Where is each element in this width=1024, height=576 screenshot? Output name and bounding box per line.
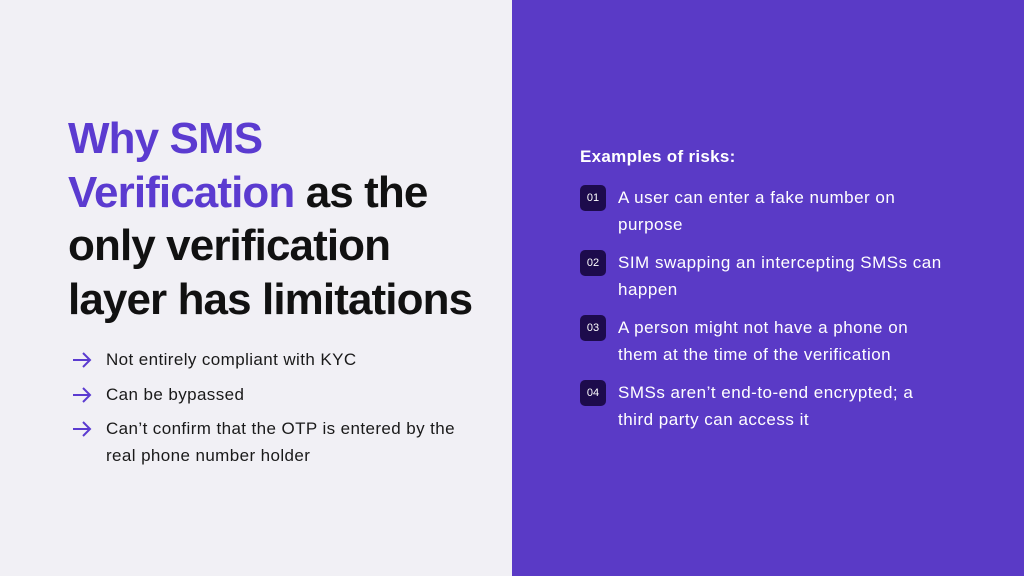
panel: left (0, 0, 512, 576)
bullet 3: Can’t confirm that the OTP is entered by the real phone number holder (106, 419, 455, 465)
item 04: SMSs aren’t end-to-end encrypted; a third party can access it (618, 383, 913, 429)
title (68, 114, 472, 324)
title: Verification as the (68, 168, 427, 216)
bullet 2: Can be bypassed (106, 385, 244, 404)
title: layer has limitations (68, 274, 472, 324)
heading: examples: Examples of risks: (580, 147, 736, 166)
title: Why SMS (68, 114, 262, 163)
panel: right (512, 0, 1024, 576)
item 03: A person might not have a phone on them at the time of the verification (618, 318, 908, 364)
item 01: A user can enter a fake number on purpose (618, 188, 895, 234)
item 02: SIM swapping an intercepting SMSs can happen (618, 253, 942, 299)
bullet 1: Not entirely compliant with KYC (106, 350, 356, 369)
item 03: 03 (587, 322, 599, 334)
item 02: 02 (587, 257, 599, 269)
title: only verification (68, 221, 390, 270)
item 01: 01 (587, 192, 599, 204)
item 04: 04 (587, 387, 599, 399)
